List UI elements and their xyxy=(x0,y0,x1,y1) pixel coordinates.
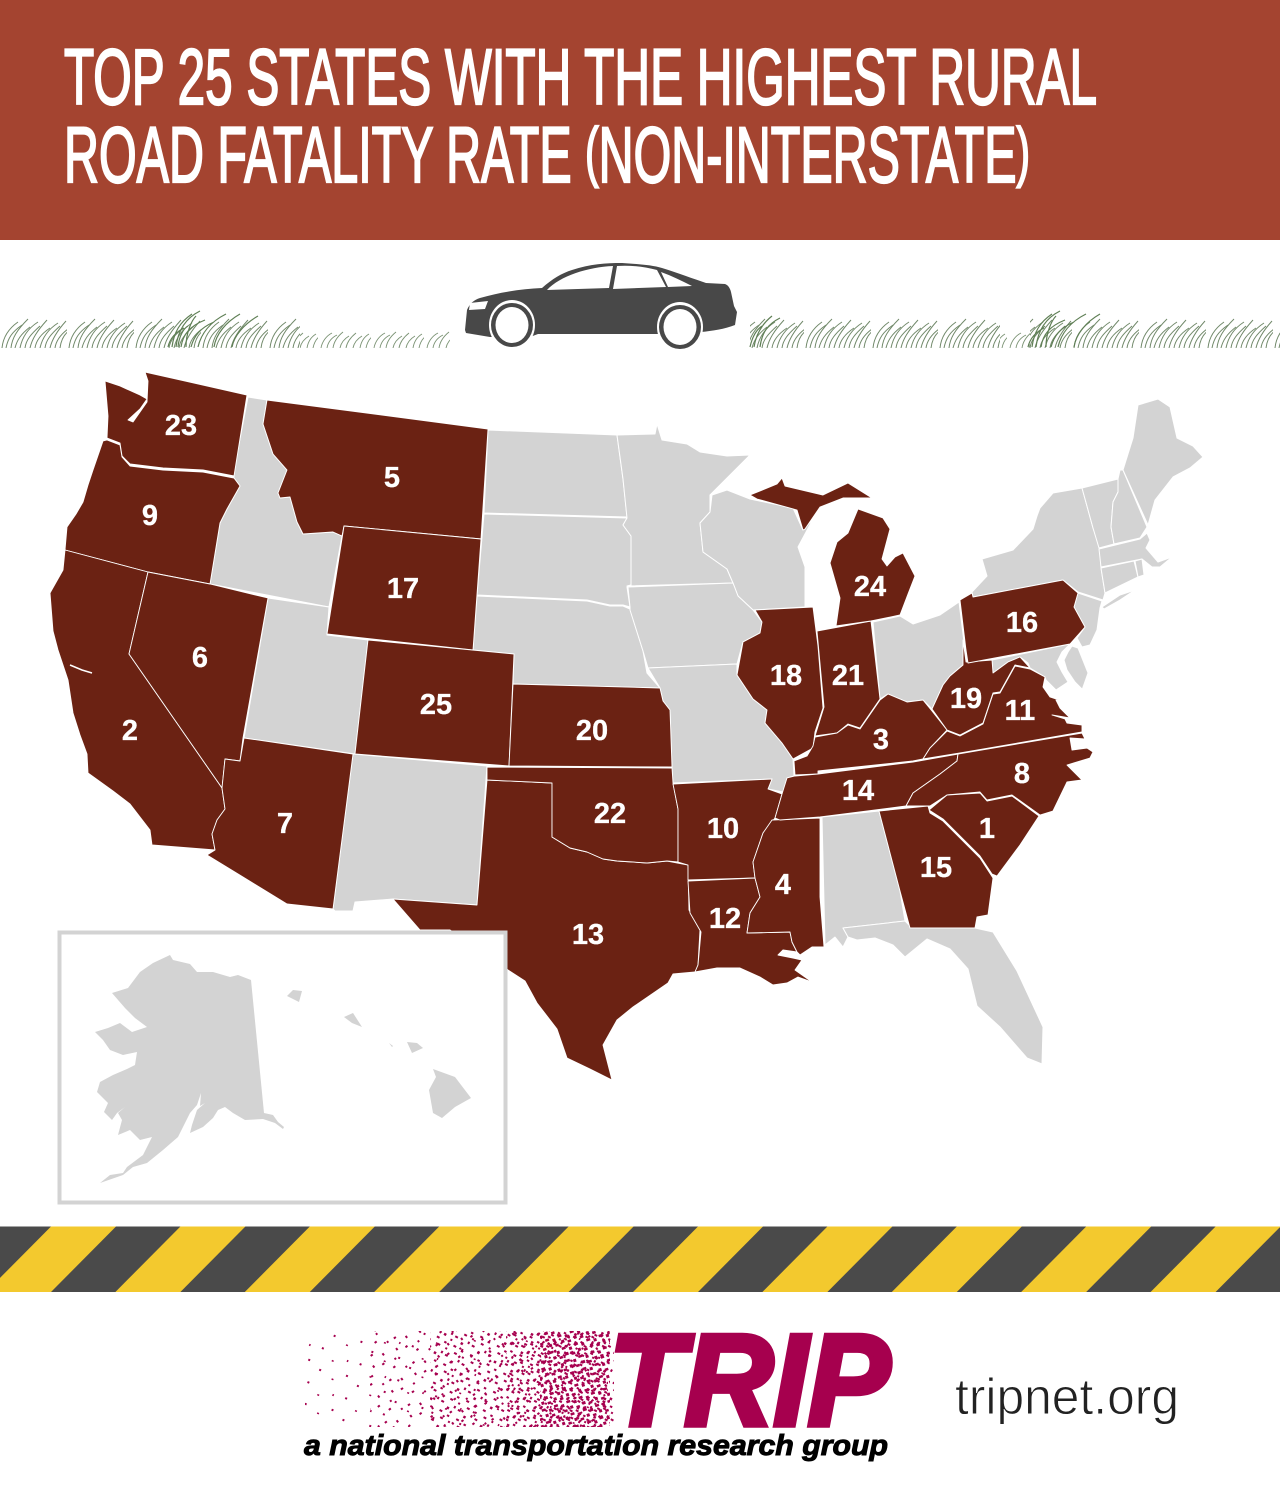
state: California, rank 2 xyxy=(50,550,225,850)
state: Idaho xyxy=(210,397,342,607)
hazard stripe band xyxy=(0,1226,1280,1292)
logo tagline: a national transportation research group xyxy=(304,1430,888,1462)
state: Illinois, rank 18 xyxy=(737,607,823,759)
state: Montana, rank 5 xyxy=(263,400,488,539)
logo wordmark: TRIP xyxy=(609,1307,890,1453)
state: Texas, rank 13 xyxy=(393,780,700,1080)
state: Pennsylvania, rank 16: 16 xyxy=(1006,607,1038,639)
state: Arkansas, rank 10 xyxy=(673,779,782,880)
state: Florida xyxy=(843,921,1043,1064)
state: Oklahoma, rank 22: 22 xyxy=(594,798,626,830)
state: Arkansas, rank 10: 10 xyxy=(707,813,739,845)
state: New Hampshire xyxy=(1111,470,1147,544)
state: Louisiana, rank 12: 12 xyxy=(709,903,741,935)
state: Kansas, rank 20: 20 xyxy=(576,715,608,747)
header banner xyxy=(0,0,1280,240)
state: Delaware and Delmarva peninsula xyxy=(1064,646,1088,705)
state: Mississippi, rank 4 xyxy=(747,818,824,955)
title: ( xyxy=(585,114,599,188)
state: Alabama xyxy=(822,811,905,947)
icon: car xyxy=(465,263,737,352)
state: Nebraska xyxy=(473,596,660,688)
state: Arizona, rank 7 xyxy=(207,738,353,909)
grass strip: left xyxy=(0,311,450,348)
state: Alaska xyxy=(95,955,284,1183)
state: Utah xyxy=(244,598,368,754)
state: Oregon, rank 9: 9 xyxy=(142,500,158,532)
state: Michigan, rank 24 xyxy=(750,478,915,626)
state: Pennsylvania, rank 16 xyxy=(960,580,1085,663)
state: Georgia, rank 15: 15 xyxy=(920,852,952,884)
state: Georgia, rank 15 xyxy=(879,806,993,928)
state: Kentucky, rank 3: 3 xyxy=(873,724,889,756)
state: North Dakota xyxy=(484,430,627,517)
state: Indiana, rank 21: 21 xyxy=(832,660,864,692)
title: ROAD FATALITY RATE xyxy=(64,110,892,199)
state: Wyoming, rank 17 xyxy=(327,526,481,650)
state: Maryland xyxy=(992,644,1070,690)
state: Long Island xyxy=(1102,590,1135,609)
state: West Virginia, rank 19 xyxy=(932,640,1030,735)
grass strip: right xyxy=(750,311,1280,348)
state: Oregon, rank 9 xyxy=(65,440,240,584)
state: Montana, rank 5: 5 xyxy=(384,462,400,494)
state: Massachusetts xyxy=(1099,533,1172,567)
state: Minnesota xyxy=(617,424,750,586)
state: Kentucky, rank 3 xyxy=(794,694,947,775)
state: Arizona, rank 7: 7 xyxy=(277,808,293,840)
state: Connecticut xyxy=(1101,561,1138,593)
state: Virginia, rank 11 xyxy=(923,666,1082,759)
website url: tripnet.org xyxy=(955,1368,1179,1425)
state: South Carolina, rank 1 xyxy=(929,793,1039,876)
state: New York xyxy=(972,488,1105,600)
state: Ohio xyxy=(873,602,964,709)
state: Vermont xyxy=(1082,479,1118,548)
state: South Carolina, rank 1: 1 xyxy=(979,813,995,845)
map: contiguous United States xyxy=(50,372,1203,1080)
state: Colorado, rank 25 xyxy=(355,640,514,766)
title xyxy=(64,32,1097,199)
state: Colorado, rank 25: 25 xyxy=(420,689,452,721)
state: Mississippi, rank 4: 4 xyxy=(775,869,791,901)
title: NON-INTERSTATE xyxy=(599,110,1017,199)
state: Washington, rank 23 xyxy=(105,372,247,476)
state: Iowa xyxy=(628,583,762,668)
state: Nevada, rank 6: 6 xyxy=(192,642,208,674)
state: New Jersey xyxy=(1074,593,1102,647)
state: South Dakota xyxy=(477,514,631,607)
state: North Carolina, rank 8 xyxy=(906,733,1093,815)
state: Texas, rank 13: 13 xyxy=(572,919,604,951)
state: Indiana, rank 21 xyxy=(815,621,880,736)
state: New Mexico xyxy=(333,754,487,911)
state: Kansas, rank 20 xyxy=(509,684,672,767)
title: ) xyxy=(1017,114,1030,188)
state: Washington, rank 23: 23 xyxy=(165,410,197,442)
state: Wyoming, rank 17: 17 xyxy=(387,573,419,605)
state: Illinois, rank 18: 18 xyxy=(770,660,802,692)
state: Tennessee, rank 14: 14 xyxy=(842,775,874,807)
state: Wisconsin xyxy=(700,490,813,610)
state: California, rank 2: 2 xyxy=(122,715,138,747)
state: Maine xyxy=(1123,399,1203,525)
state: Rhode Island xyxy=(1135,559,1144,577)
logo particle speckle xyxy=(305,1331,614,1427)
state: West Virginia, rank 19: 19 xyxy=(950,683,982,715)
state: Michigan, rank 24: 24 xyxy=(854,571,886,603)
state: Oklahoma, rank 22 xyxy=(487,767,678,863)
state: Virginia, rank 11: 11 xyxy=(1005,695,1035,727)
state: Missouri xyxy=(648,664,794,792)
inset: Alaska and Hawaii xyxy=(60,932,506,1202)
logo: TRIP xyxy=(304,1307,890,1462)
state: North Carolina, rank 8: 8 xyxy=(1014,758,1030,790)
state: Louisiana, rank 12 xyxy=(688,878,812,985)
state: Nevada, rank 6 xyxy=(129,572,268,788)
state: Hawaii xyxy=(287,990,471,1118)
state: Tennessee, rank 14 xyxy=(775,754,958,820)
